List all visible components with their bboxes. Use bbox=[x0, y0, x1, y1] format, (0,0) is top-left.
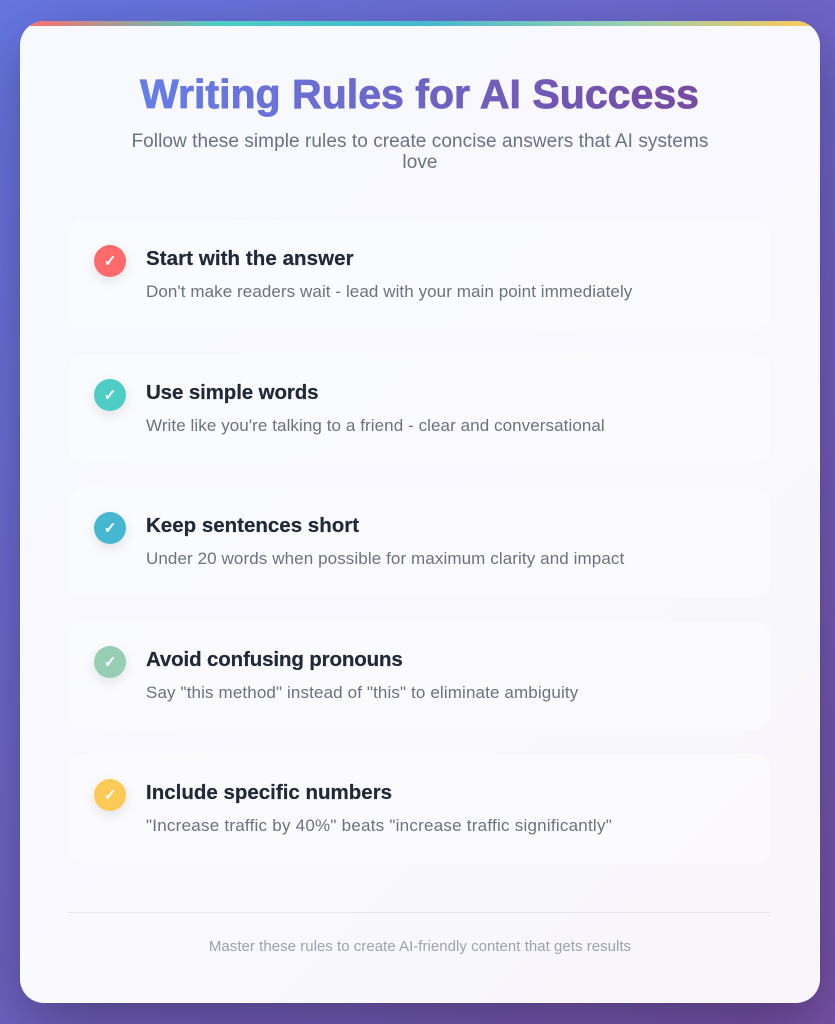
panel: rule 2 bbox=[68, 354, 771, 463]
icon: yellow check: ✓ bbox=[104, 786, 116, 804]
rule 1 description: Don't make readers wait - lead with your main point immediately bbox=[146, 282, 632, 301]
icon: blue check: ✓ bbox=[104, 519, 116, 537]
subtitle: Follow these simple rules to create concise answers that AI systems bbox=[131, 131, 709, 152]
panel: rule 3 bbox=[68, 487, 771, 597]
icon: teal check bbox=[94, 379, 126, 411]
icon: yellow check bbox=[94, 779, 126, 811]
subtitle: love bbox=[402, 152, 438, 173]
footer note: Master these rules to create AI-friendly content that gets results bbox=[209, 938, 631, 955]
panel: rule 5 bbox=[68, 754, 771, 864]
rule 5 description: "Increase traffic by 40%" beats "increase traffic significantly" bbox=[146, 816, 612, 835]
rule 1 heading: Start with the answer bbox=[146, 247, 354, 270]
icon: red check: ✓ bbox=[104, 252, 116, 270]
title: Writing Rules for AI Success bbox=[140, 71, 699, 117]
rule 4 description: Say "this method" instead of "this" to eliminate ambiguity bbox=[146, 683, 578, 702]
icon: green check bbox=[94, 646, 126, 678]
rule 5 heading: Include specific numbers bbox=[146, 781, 392, 804]
icon: red check bbox=[94, 245, 126, 277]
icon: blue check bbox=[94, 512, 126, 544]
rule 3 description: Under 20 words when possible for maximum clarity and impact bbox=[146, 549, 624, 568]
rule 2 description: Write like you're talking to a friend - clear and conversational bbox=[146, 416, 605, 435]
panel: rule 4 bbox=[68, 621, 771, 730]
icon: green check: ✓ bbox=[104, 653, 116, 671]
subtitle bbox=[131, 131, 709, 173]
rule 2 heading: Use simple words bbox=[146, 381, 318, 404]
rule 4 heading: Avoid confusing pronouns bbox=[146, 648, 403, 671]
icon: teal check: ✓ bbox=[104, 386, 116, 404]
panel: rule 1 bbox=[68, 220, 771, 330]
rainbow top bar bbox=[20, 21, 820, 26]
rule 3 heading: Keep sentences short bbox=[146, 514, 359, 537]
